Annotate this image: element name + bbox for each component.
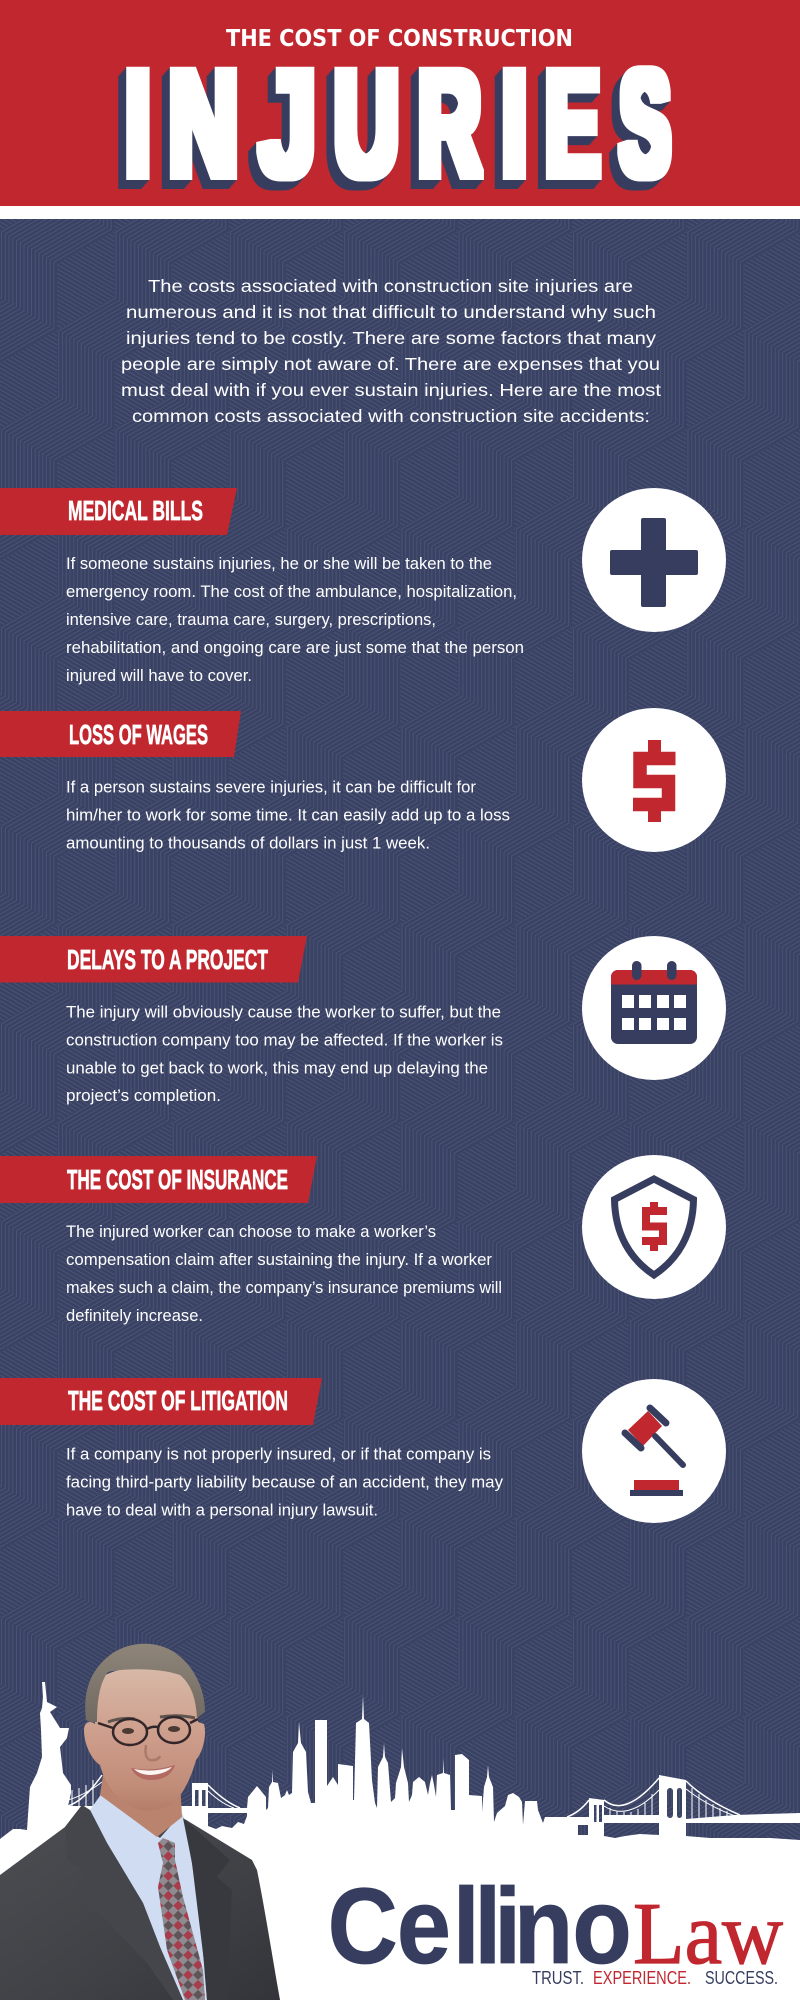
- text: medical bills: intensive care, trauma care, surgery, prescriptions,: [66, 611, 436, 629]
- heading banner: the cost of litigation: THE COST OF LITIGATION: [68, 1385, 288, 1416]
- attorney portrait: [0, 1644, 280, 2000]
- text: delays to a project: project’s completion.: [66, 1087, 221, 1105]
- title: injuries: I: [125, 40, 151, 207]
- panel: delays to a project: [0, 936, 726, 1105]
- heading banner: loss of wages: [0, 711, 241, 757]
- icon: medical cross: [582, 488, 726, 632]
- text: medical bills: injured will have to cover.: [66, 667, 252, 685]
- heading banner: the cost of insurance: [0, 1156, 317, 1203]
- intro paragraph: injuries tend to be costly. There are some factors that many: [126, 328, 656, 348]
- panel: the cost of insurance: [0, 1155, 726, 1325]
- text: the cost of insurance: [66, 1223, 502, 1325]
- title: the cost of construction: THE COST OF CONSTRUCTION: [226, 25, 573, 52]
- text: loss of wages: amounting to thousands of dollars in just 1 week.: [66, 834, 430, 852]
- heading banner: medical bills: MEDICAL BILLS: [68, 495, 203, 526]
- text: delays to a project: [66, 1004, 503, 1105]
- intro paragraph: numerous and it is not that difficult to understand why such: [126, 302, 656, 322]
- hair: [85, 1644, 205, 1722]
- icon: calendar: [582, 936, 726, 1080]
- skyline silhouette: [0, 1682, 800, 2000]
- text: loss of wages: If a person sustains severe injuries, it can be difficult for: [66, 778, 476, 796]
- text: the cost of insurance: The injured worker can choose to make a worker’s: [66, 1223, 436, 1241]
- intro paragraph: [121, 276, 661, 426]
- tagline: EXPERIENCE.: [593, 1968, 691, 1988]
- title: injuries: [125, 39, 670, 208]
- text: loss of wages: [66, 778, 510, 852]
- panel: medical bills: [0, 488, 726, 685]
- intro paragraph: common costs associated with construction site accidents:: [132, 406, 650, 426]
- logo: Cellino Law: Cellino: [328, 1865, 632, 1986]
- tagline: TRUST.: [532, 1968, 584, 1988]
- title: injuries: I: [502, 40, 527, 207]
- text: loss of wages: him/her to work for some time. It can easily add up to a loss: [66, 806, 510, 824]
- text: delays to a project: unable to get back to work, this may end up delaying the: [66, 1060, 488, 1078]
- title: injuries: J: [260, 41, 316, 208]
- text: the cost of insurance: makes such a claim, the company’s insurance premiums will: [66, 1279, 502, 1297]
- title: injuries: N: [168, 39, 239, 207]
- intro paragraph: people are simply not aware of. There are expenses that you: [121, 354, 660, 374]
- suit: [0, 1805, 280, 2000]
- nose shadow: [146, 1745, 160, 1760]
- panel: the cost of litigation: [0, 1378, 726, 1523]
- logo: Cellino Law: [328, 1865, 783, 1988]
- eyes: [122, 1726, 180, 1734]
- logo: Cellino Law: Law: [633, 1886, 783, 1983]
- icon: dollar sign: [582, 708, 726, 852]
- title: injuries: E: [545, 40, 600, 207]
- text: the cost of litigation: facing third-party liability because of an accident, they may: [66, 1474, 504, 1492]
- text: the cost of litigation: If a company is not properly insured, or if that company is: [66, 1446, 491, 1464]
- text: the cost of insurance: compensation claim after sustaining the injury. If a worker: [66, 1251, 493, 1269]
- text: delays to a project: The injury will obviously cause the worker to suffer, but the: [66, 1004, 501, 1022]
- shirt: [90, 1793, 207, 2000]
- title: injuries: U: [334, 40, 399, 208]
- tagline: [532, 1968, 778, 1988]
- title: injuries: S: [620, 41, 670, 208]
- panel: loss of wages: [0, 708, 726, 852]
- brows: [108, 1716, 195, 1722]
- text: the cost of insurance: definitely increase.: [66, 1307, 203, 1325]
- text: delays to a project: construction company too may be affected. If the worker is: [66, 1032, 503, 1050]
- heading banner: loss of wages: LOSS OF WAGES: [69, 719, 208, 750]
- intro paragraph: The costs associated with construction site injuries are: [148, 276, 633, 296]
- left lapel: [65, 1805, 183, 2000]
- text: medical bills: emergency room. The cost of the ambulance, hospitalization,: [66, 583, 517, 601]
- heading banner: the cost of litigation: [0, 1378, 322, 1425]
- heading banner: delays to a project: [0, 936, 307, 982]
- text: the cost of litigation: have to deal with a personal injury lawsuit.: [66, 1502, 378, 1520]
- face: [84, 1667, 205, 1811]
- text: the cost of litigation: [66, 1446, 504, 1520]
- header band: [0, 0, 800, 219]
- heading banner: delays to a project: DELAYS TO A PROJECT: [67, 944, 268, 975]
- neck: [100, 1775, 182, 1837]
- title: injuries: R: [418, 39, 481, 207]
- smile: [131, 1765, 175, 1780]
- tie: [158, 1838, 205, 2000]
- intro paragraph: must deal with if you ever sustain injuries. Here are the most: [121, 380, 661, 400]
- right lapel: [183, 1818, 232, 2000]
- tagline: SUCCESS.: [705, 1968, 778, 1988]
- heading banner: the cost of insurance: THE COST OF INSURANCE: [67, 1164, 288, 1195]
- text: medical bills: [66, 555, 524, 685]
- text: medical bills: rehabilitation, and ongoing care are just some that the person: [66, 639, 524, 657]
- icon: shield with dollar: [582, 1155, 726, 1299]
- heading banner: medical bills: [0, 488, 237, 535]
- text: medical bills: If someone sustains injuries, he or she will be taken to the: [66, 555, 492, 573]
- glasses: [98, 1717, 198, 1745]
- icon: gavel: [582, 1379, 726, 1523]
